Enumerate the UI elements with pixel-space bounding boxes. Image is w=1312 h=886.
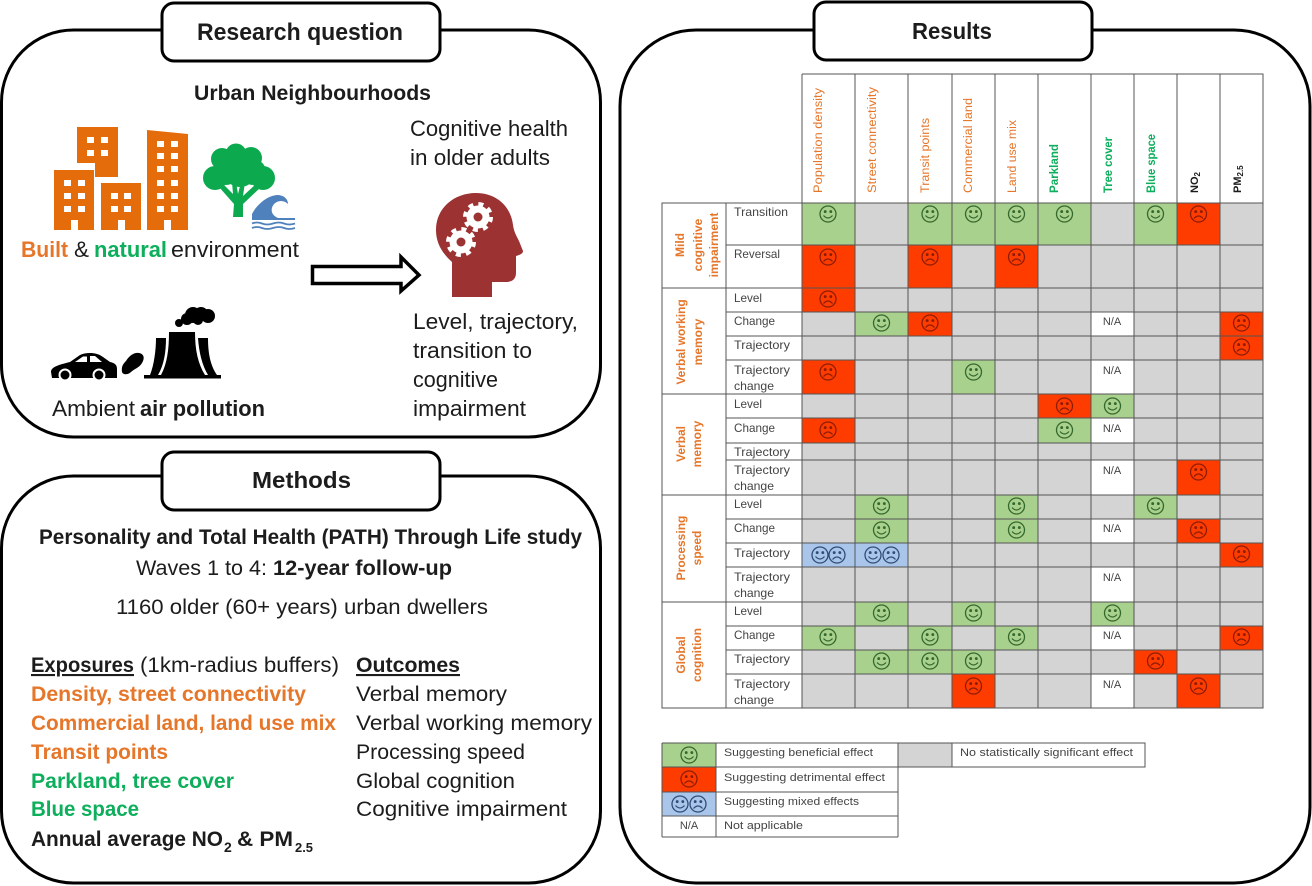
legend swatches (662, 743, 952, 816)
panel: results (620, 2, 1310, 883)
text: cognitive health in older adults (410, 116, 568, 170)
icon: power plant with smoke (144, 307, 221, 378)
outcome group labels: memory (691, 318, 705, 365)
frowning face icons (820, 206, 1250, 694)
exposure column headers: Population density (813, 88, 825, 193)
grid lines (662, 74, 1263, 708)
measure row labels: Level (734, 497, 762, 511)
matrix background (802, 203, 1263, 708)
text: ambient air pollution: Ambient (52, 396, 135, 421)
measure row labels: Trajectory (734, 463, 790, 477)
exposure column headers: Street connectivity (867, 87, 879, 193)
outcome group labels: impairment (707, 213, 721, 277)
list: outcomes: Cognitive impairment (356, 798, 567, 821)
text: built and natural environment: & (74, 237, 89, 262)
list: outcomes: Outcomes (356, 654, 460, 677)
exposure column headers: Parkland (1049, 144, 1061, 193)
outcome group labels: Verbal (674, 426, 688, 462)
icon: tree (203, 144, 275, 217)
icon: car with exhaust (51, 353, 144, 380)
list: exposures: (1km-radius buffers) (140, 654, 339, 677)
legend text: No statistically significant effect (960, 747, 1133, 759)
mixed effect face icons (812, 547, 899, 563)
measure row labels: Level (734, 291, 762, 305)
list: exposures: Exposures (31, 654, 134, 677)
detrimental effect cells (802, 203, 1263, 708)
not applicable cells (1091, 312, 1134, 708)
list: outcomes (356, 654, 593, 821)
text: cognitive health in older adults: in older adults (410, 145, 550, 170)
measure row labels: Trajectory (734, 570, 790, 584)
text: waves and follow-up: 12-year follow-up (273, 557, 452, 580)
legend icons (672, 747, 706, 812)
measure row labels: change (734, 586, 774, 600)
text: level, trajectory, transition: cognitive (413, 367, 498, 392)
text: sample: 1160 older (60+ years) urban dwellers (116, 596, 488, 619)
measure row labels: Level (734, 604, 762, 618)
heading: results (814, 2, 1092, 60)
exposure column headers: Land use mix (1007, 120, 1019, 193)
legend text: Not applicable (724, 820, 803, 832)
heading: research question: Research question (197, 19, 403, 46)
panel: methods (2, 452, 600, 883)
exposure column headers (813, 87, 1245, 193)
smiling face icons (820, 206, 1164, 669)
panel: research question (2, 3, 600, 437)
icon: buildings (54, 127, 188, 230)
exposure column headers: PM (1232, 176, 1244, 193)
outcome group labels: Mild (673, 233, 687, 257)
list: exposures: 2 (224, 839, 232, 855)
text: level, trajectory, transition: Level, trajectory, (413, 309, 578, 334)
measure row labels: Trajectory (734, 338, 790, 352)
legend text (680, 747, 1133, 832)
list: outcomes: Processing speed (356, 741, 525, 764)
list: exposures: Annual average NO (31, 828, 223, 851)
beneficial effect cells (802, 203, 1177, 674)
text: built and natural environment: Built (21, 237, 69, 262)
legend lines (662, 743, 1145, 837)
measure row labels: change (734, 479, 774, 493)
measure row labels: Trajectory (734, 677, 790, 691)
measure row labels: Trajectory (734, 363, 790, 377)
measure row labels: change (734, 693, 774, 707)
subheading: urban neighbourhoods: Urban Neighbourhoods (194, 82, 431, 105)
exposure column headers: 2 (1193, 172, 1202, 176)
outcome group labels: memory (690, 420, 704, 467)
legend text: Suggesting mixed effects (724, 796, 860, 808)
outcome group labels: cognitive (691, 218, 705, 271)
text: waves and follow-up: Waves 1 to 4: (136, 557, 267, 580)
text: level, trajectory, transition: impairment (413, 396, 526, 421)
outcome group labels: Global (674, 636, 688, 674)
exposure column headers: NO (1189, 176, 1201, 193)
measure row labels: Transition (734, 205, 788, 219)
legend (662, 743, 1145, 837)
text: built and natural environment: natural (94, 237, 167, 262)
list: outcomes: Verbal working memory (356, 712, 593, 735)
text: ambient air pollution (52, 396, 265, 421)
exposure column headers: Transit points (920, 118, 932, 193)
not applicable cells: N/A (1103, 630, 1122, 642)
heading: methods (162, 452, 440, 510)
outcome group labels: cognition (690, 628, 704, 682)
measure row labels: Reversal (734, 247, 780, 261)
measure row labels: Level (734, 397, 762, 411)
text: ambient air pollution: air pollution (140, 396, 265, 421)
measure row labels: Change (734, 521, 775, 535)
arrow (312, 257, 419, 291)
outcome group labels: speed (690, 531, 704, 565)
legend text: N/A (680, 820, 699, 832)
text: level, trajectory, transition: transition to (413, 338, 532, 363)
exposure column headers: 2.5 (1236, 165, 1245, 176)
icon: wave (252, 195, 295, 229)
measure row labels: Trajectory (734, 546, 790, 560)
list: outcomes: Global cognition (356, 770, 515, 793)
text: cognitive health in older adults: Cognitive health (410, 116, 568, 141)
measure row labels: Trajectory (734, 652, 790, 666)
text: study name: Personality and Total Health (PATH) Through Life study (39, 526, 582, 549)
measure row labels: Change (734, 314, 775, 328)
heading: research question (162, 3, 440, 61)
outcome group labels: Processing (674, 516, 688, 580)
text: waves and follow-up (136, 557, 452, 580)
heading: results: Results (912, 18, 992, 44)
measure row labels: Trajectory (734, 445, 790, 459)
results matrix (662, 74, 1263, 708)
list: exposures: & PM (237, 828, 293, 851)
not applicable cells: N/A (1103, 423, 1122, 435)
list: outcomes: Verbal memory (356, 683, 508, 706)
list: exposures: Parkland, tree cover (31, 770, 234, 793)
legend text: Suggesting beneficial effect (724, 747, 873, 759)
not applicable cells: N/A (1103, 572, 1122, 584)
not applicable cells: N/A (1103, 365, 1122, 377)
not applicable cells: N/A (1103, 316, 1122, 328)
mixed effect cells (802, 543, 908, 567)
text: built and natural environment: environment (171, 237, 299, 262)
list: exposures: Transit points (31, 741, 168, 764)
text: level, trajectory, transition (413, 309, 578, 421)
not applicable cells: N/A (1103, 465, 1122, 477)
not applicable cells: N/A (1103, 523, 1122, 535)
icon: head with gears (436, 193, 523, 297)
outcome group labels (673, 213, 721, 682)
list: exposures (31, 654, 339, 855)
list: exposures: Density, street connectivity (31, 683, 306, 706)
exposure column headers: Tree cover (1103, 136, 1115, 193)
measure row labels: Change (734, 421, 775, 435)
list: exposures: 2.5 (295, 840, 313, 855)
measure row labels (734, 205, 790, 707)
outcome group labels: Verbal working (674, 299, 688, 385)
list: exposures: Blue space (31, 798, 139, 821)
measure row labels: change (734, 379, 774, 393)
measure row labels: Change (734, 628, 775, 642)
not applicable cells: N/A (1103, 679, 1122, 691)
legend text: Suggesting detrimental effect (724, 772, 885, 784)
text: built and natural environment (21, 237, 299, 262)
exposure column headers: Commercial land (963, 98, 975, 193)
list: exposures: Commercial land, land use mix (31, 712, 336, 735)
heading: methods: Methods (252, 467, 351, 493)
exposure column headers: Blue space (1146, 134, 1158, 193)
